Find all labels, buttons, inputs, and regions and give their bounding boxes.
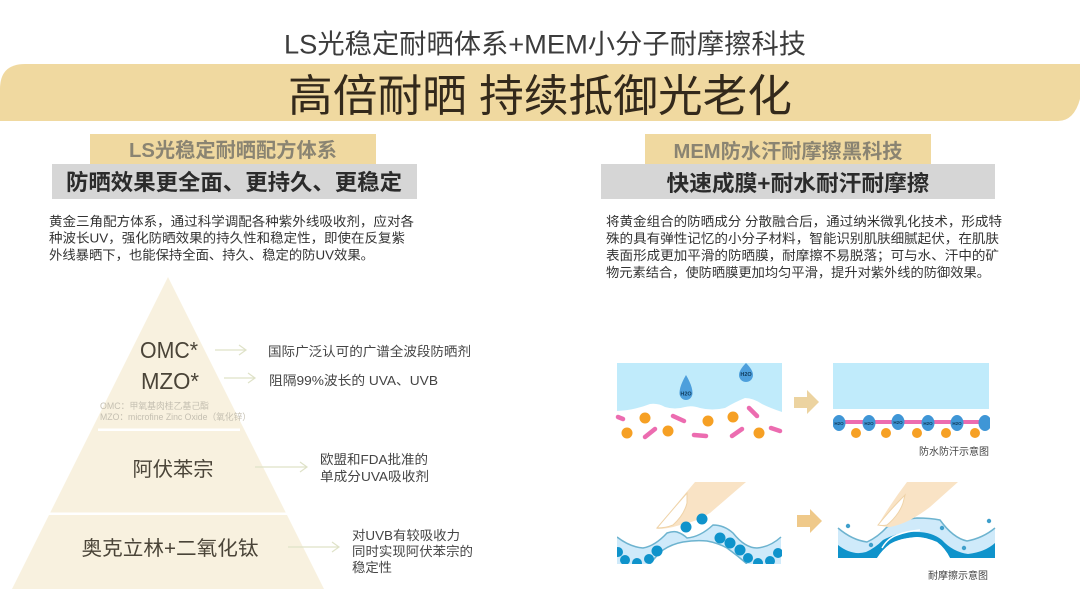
panel: MEM technology xyxy=(601,134,1002,582)
heading: LS system xyxy=(90,134,376,164)
note: octocrylene xyxy=(352,528,473,575)
arrow: rub step xyxy=(797,509,822,533)
heading: MEM technology xyxy=(645,134,931,164)
skin before xyxy=(613,525,783,568)
pyramid tier: middle: 阿伏苯宗 xyxy=(132,458,214,481)
subheading: more complete, lasting, stable xyxy=(52,164,417,199)
pyramid tier: top: MZO：microfine Zinc Oxide（氧化锌） xyxy=(100,411,251,422)
text block: MEM description: 表面形成更加平滑的防晒膜，耐摩擦不易脱落；可与水、汗中的矿 xyxy=(606,248,999,264)
diagram: rub resistance xyxy=(613,482,995,582)
pyramid tier: top: MZO* xyxy=(141,368,199,394)
heading: LS system: LS光稳定耐晒配方体系 xyxy=(129,138,337,162)
pyramid tier: top: OMC* xyxy=(140,337,198,363)
arrow: MZO xyxy=(224,373,255,383)
note: avobenzone: 单成分UVA吸收剂 xyxy=(320,469,429,484)
diagram: water and sweat resistance xyxy=(617,363,992,458)
water before: H2O xyxy=(680,392,692,398)
note: octocrylene: 同时实现阿伏苯宗的 xyxy=(352,544,473,559)
note: MZO: 阻隔99%波长的 UVA、UVB xyxy=(269,373,438,388)
water before: H2O xyxy=(740,372,752,378)
note: OMC: 国际广泛认可的广谱全波段防晒剂 xyxy=(268,344,471,359)
caption: rub diagram: 耐摩擦示意图 xyxy=(928,569,988,582)
subheading: quick film forming xyxy=(601,164,995,199)
pyramid tier: top: OMC：甲氧基肉桂乙基己酯 xyxy=(100,400,209,411)
text block: LS description: 种波长UV，强化防晒效果的持久性和稳定性，即使在反复紫 xyxy=(49,230,405,246)
icon: finger after xyxy=(878,482,958,527)
arrow: water step xyxy=(794,390,819,414)
subheading: more complete, lasting, stable: 防晒效果更全面、更持久、更稳定 xyxy=(66,170,402,195)
note: avobenzone xyxy=(320,452,429,484)
water before xyxy=(617,363,782,438)
arrow: octocrylene xyxy=(288,542,339,552)
pyramid shape xyxy=(12,277,324,589)
text block: LS description: 外线暴晒下，也能保持全面、持久、稳定的防UV效果。 xyxy=(49,248,374,262)
note: avobenzone: 欧盟和FDA批准的 xyxy=(320,452,428,467)
arrow: OMC xyxy=(215,345,246,355)
water after: H2O xyxy=(864,421,874,426)
water after: H2O xyxy=(923,421,933,426)
main title: 高倍耐晒 持续抵御光老化 xyxy=(288,72,792,121)
subtitle: LS光稳定耐晒体系+MEM小分子耐摩擦科技 xyxy=(284,30,806,60)
text block: LS description xyxy=(49,214,414,262)
water after: H2O xyxy=(834,421,844,426)
heading: MEM technology: MEM防水汗耐摩擦黑科技 xyxy=(674,140,902,163)
icon: finger before xyxy=(657,482,746,532)
water after: H2O xyxy=(893,420,903,425)
water after: H2O xyxy=(952,421,962,426)
title banner xyxy=(0,64,1080,121)
note: octocrylene: 对UVB有较吸收力 xyxy=(352,528,460,543)
arrow: avobenzone xyxy=(255,462,307,472)
text block: MEM description: 物元素结合，使防晒膜更加均匀平滑，提升对紫外线的防御效果。 xyxy=(606,265,990,280)
note: octocrylene: 稳定性 xyxy=(352,560,392,575)
text block: MEM description xyxy=(606,214,1002,280)
text block: LS description: 黄金三角配方体系，通过科学调配各种紫外线吸收剂，应对各 xyxy=(49,214,414,229)
subheading: quick film forming: 快速成膜+耐水耐汗耐摩擦 xyxy=(666,171,930,196)
chart: formula pyramid xyxy=(12,277,473,589)
text block: MEM description: 将黄金组合的防晒成分 分散融合后，通过纳米微乳化技术，形成特 xyxy=(606,214,1002,229)
pyramid tier: top xyxy=(100,337,251,422)
pyramid tier: base: 奥克立林+二氧化钛 xyxy=(82,537,258,560)
text block: MEM description: 殊的具有弹性记忆的小分子材料，智能识别肌肤细腻起伏，在肌肤 xyxy=(606,231,999,246)
skin after xyxy=(838,518,995,558)
water after xyxy=(832,363,992,438)
panel: LS formula system xyxy=(12,134,473,589)
caption: water diagram: 防水防汗示意图 xyxy=(919,445,989,458)
